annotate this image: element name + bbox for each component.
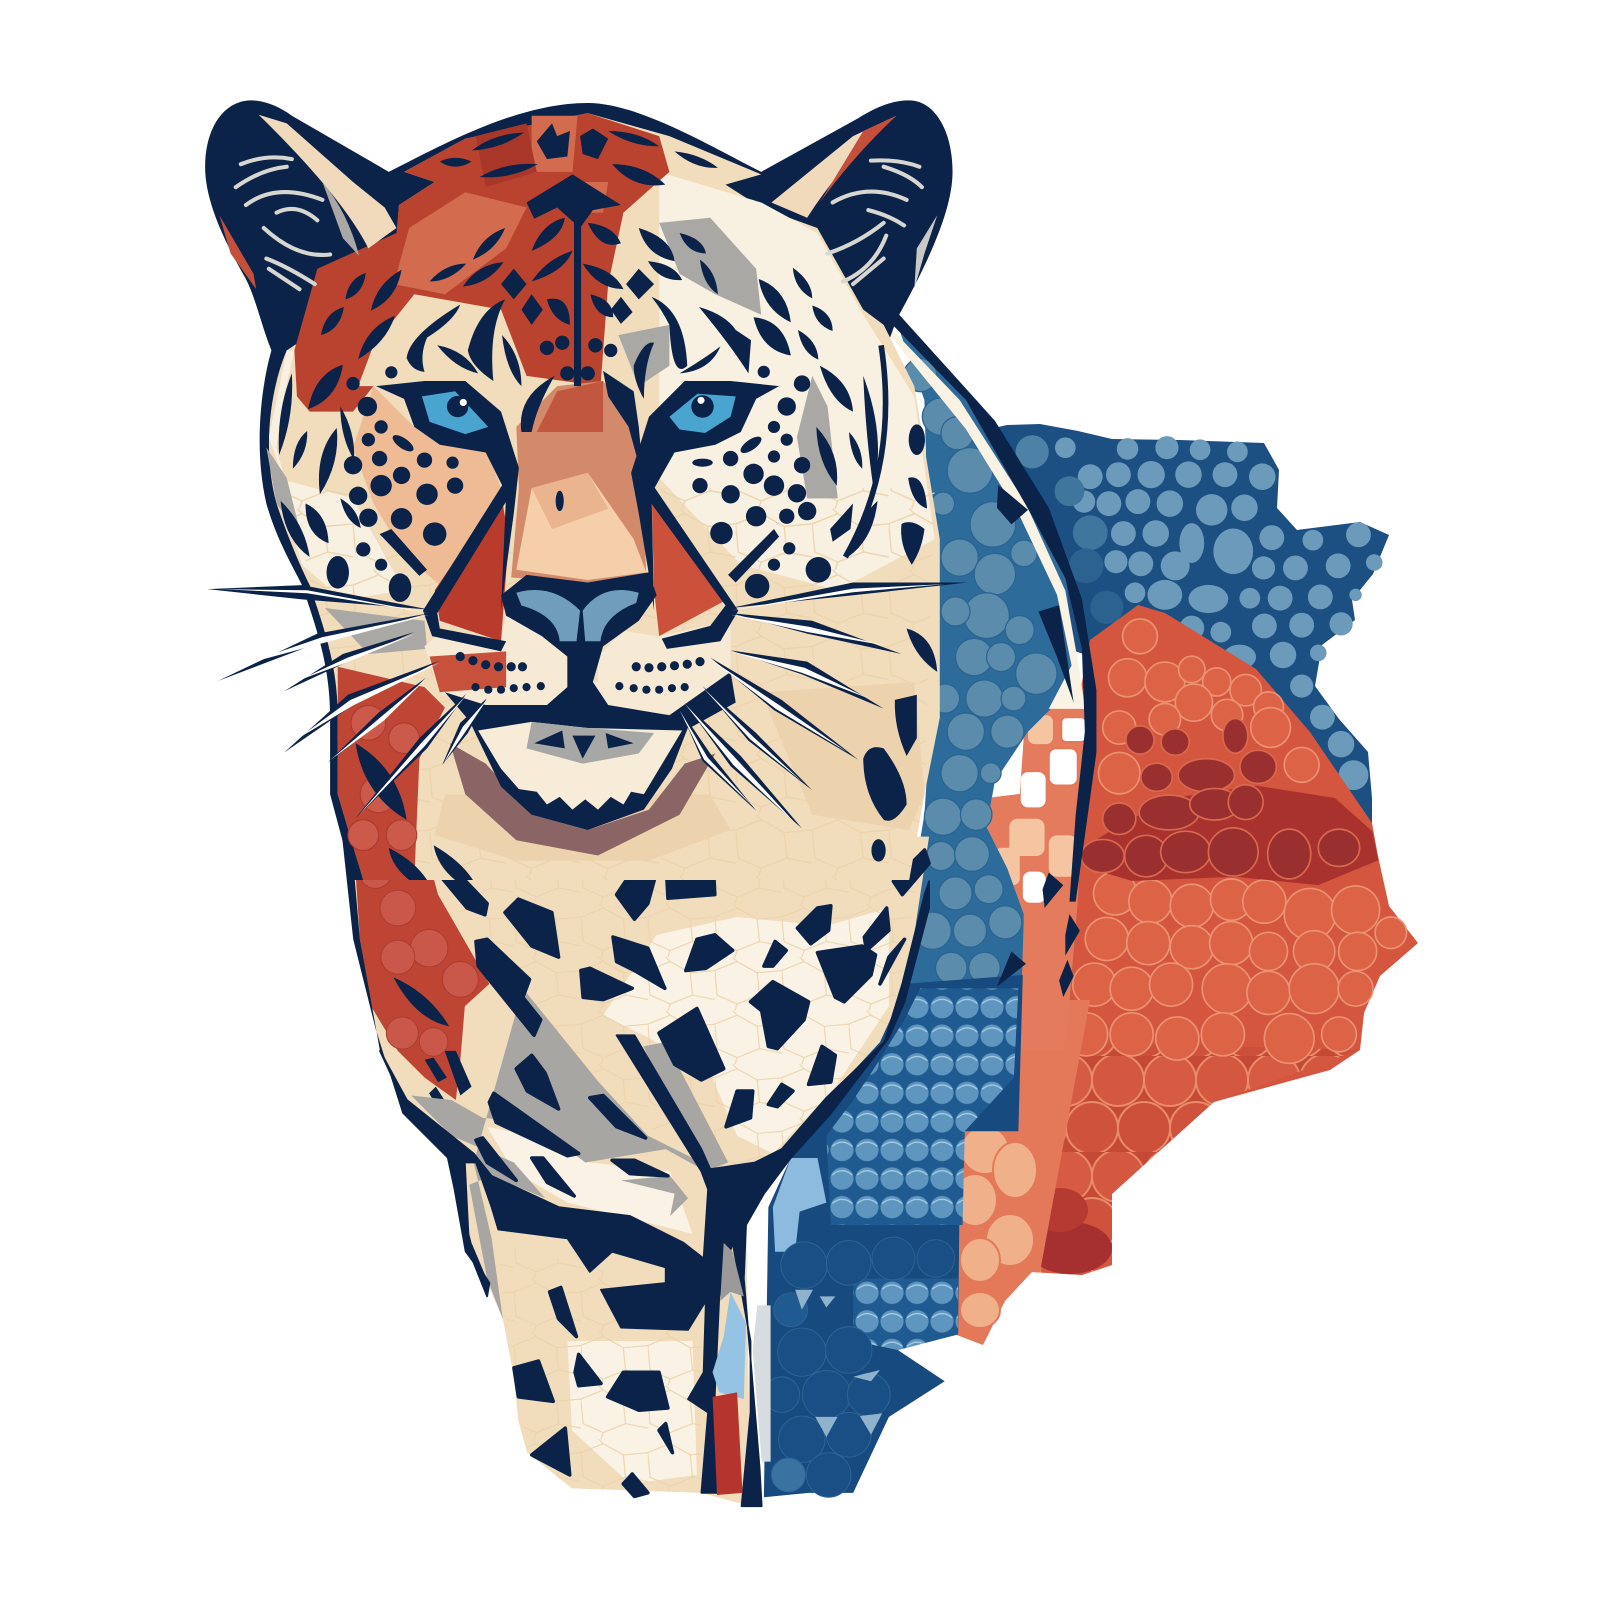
blue dotted hide patch (985, 424, 1389, 830)
head navy silhouette with ears (205, 100, 953, 880)
whiskers (208, 583, 968, 828)
pale upper face (277, 172, 935, 600)
center chest line and leg stripes (380, 881, 929, 1506)
inner leg colored strip (713, 1292, 746, 1399)
right inner cheek line (845, 345, 886, 557)
eye masks and tear lines (376, 371, 779, 651)
red left jaw and shoulder (325, 608, 445, 880)
body and legs (342, 837, 929, 1506)
mouth and teeth (470, 713, 690, 830)
head (205, 100, 968, 880)
leopard spots (279, 123, 937, 880)
muzzle (424, 616, 731, 718)
cream body base (349, 837, 929, 1506)
right eye (669, 394, 736, 433)
gray forehead shadow (618, 218, 838, 498)
chin shadow (450, 743, 715, 856)
ear details (219, 115, 937, 289)
white chest zone (487, 908, 889, 1484)
chest and leg spots (434, 850, 929, 1496)
peach left cheek (353, 386, 501, 585)
mosaic cell texture (434, 837, 925, 1493)
red forehead patch (294, 113, 669, 412)
left navy body edge (342, 837, 489, 1285)
red cheek triangles (435, 493, 509, 641)
nose (445, 572, 736, 728)
beige lower face wash (435, 682, 924, 861)
back contour line (883, 311, 1096, 997)
gray shadow strokes (411, 988, 728, 1319)
beige honeycomb strip (953, 707, 1090, 1345)
mosaic cell texture (287, 488, 935, 880)
red shoulder (353, 837, 489, 1125)
nose bridge (511, 381, 646, 583)
cream face base (269, 113, 940, 880)
left eye (422, 391, 488, 434)
red scaled hide patch (1010, 605, 1418, 1275)
blue scaled column (764, 320, 1074, 1497)
